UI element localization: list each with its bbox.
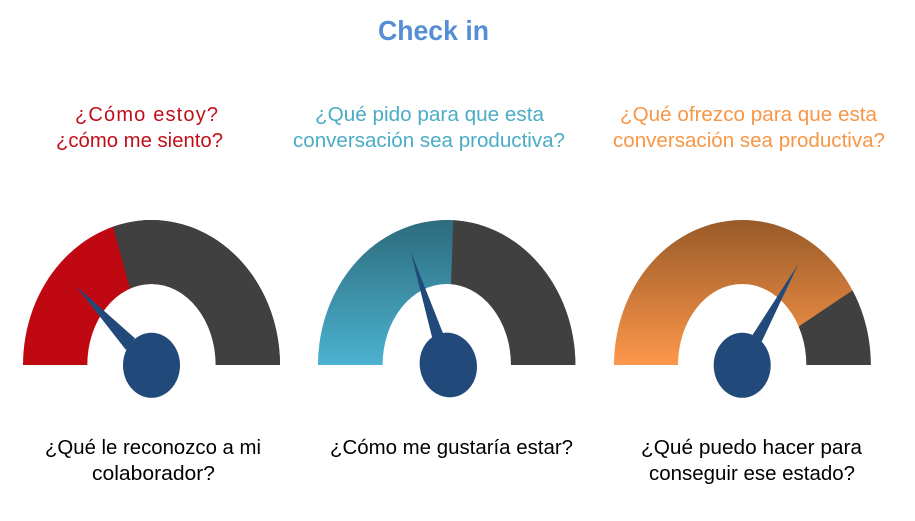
gauge 1 hub [123,333,180,398]
heading: what I ask: ¿Qué pido para que esta [315,104,545,126]
caption: what I can do: ¿Qué puedo hacer para [641,437,863,459]
caption: what I can do [641,437,863,485]
caption: desired state: ¿Cómo me gustaría estar? [330,437,573,459]
gauge: red [23,220,280,398]
gauge 2 dark segment [451,220,576,365]
gauge 1 needle [76,286,135,350]
caption: recognition [45,437,261,485]
gauge: teal [318,220,575,403]
heading: what I offer [613,104,885,152]
gauge 1 dark segment [113,220,280,365]
gauge: orange [614,220,871,398]
gauge 3 needle [752,264,798,342]
caption: recognition: ¿Qué le reconozco a mi [45,437,261,459]
heading: how am I [56,104,223,152]
caption: recognition: colaborador? [92,463,215,485]
heading: what I ask: conversación sea productiva? [293,130,565,152]
gauge 3 hub [714,333,771,398]
gauge 3 dark segment [798,290,871,365]
heading: what I ask [293,104,565,152]
heading: how am I: ¿cómo me siento? [56,130,223,152]
heading: what I offer: conversación sea productiva? [613,130,885,152]
gauge 2 needle [410,251,444,339]
heading: how am I: ¿Cómo estoy? [75,104,218,126]
gauge 2 hub [414,327,483,403]
caption: what I can do: conseguir ese estado? [649,463,855,485]
gauge 1 red ring [23,220,280,365]
heading: what I offer: ¿Qué ofrezco para que esta [620,104,878,126]
gauge 3 orange ring [614,220,871,365]
title: Check in [378,15,489,46]
gauge 2 teal ring [318,220,575,365]
